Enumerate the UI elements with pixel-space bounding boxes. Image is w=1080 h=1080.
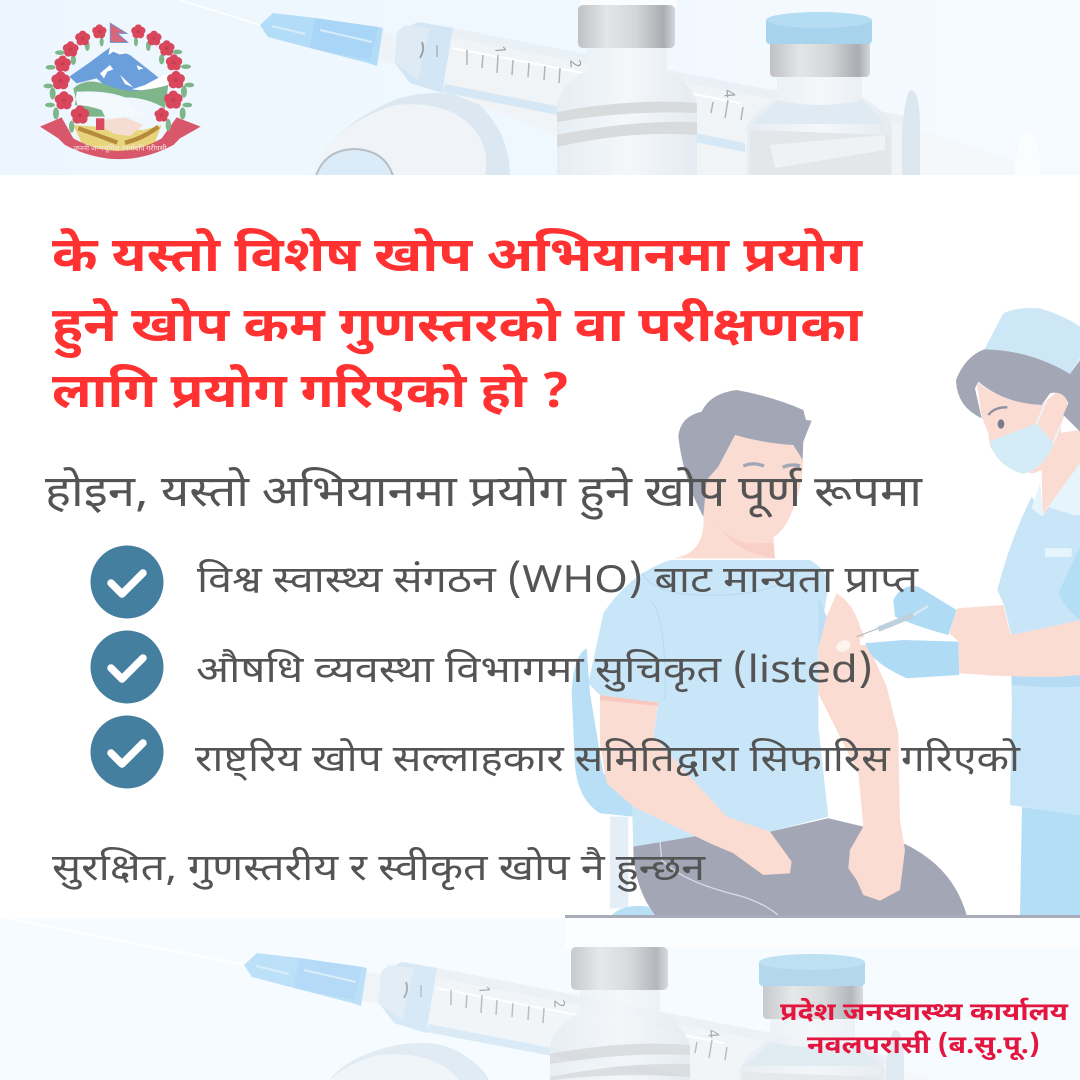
nurse tunic bbox=[997, 467, 1080, 699]
tunic pocket bbox=[1045, 548, 1072, 557]
illustration: nurse vaccinating a seated man bbox=[565, 308, 1080, 918]
nurse trousers bbox=[1020, 807, 1080, 915]
hair bbox=[678, 390, 812, 517]
seated man's body bbox=[572, 560, 967, 915]
emblem leaves bbox=[43, 37, 194, 133]
t-shirt bbox=[588, 560, 828, 847]
emblem flag bbox=[110, 23, 128, 42]
syringe scale digits, top: 2 bbox=[563, 59, 583, 69]
syringe scale digits, bottom: 2 bbox=[547, 999, 567, 1009]
top banner: syringe bbox=[260, 13, 1041, 176]
syringe scale digits, bottom: 4 bbox=[701, 1029, 721, 1039]
trouser seam bbox=[660, 842, 778, 915]
seated man's head bbox=[673, 390, 812, 558]
organization name bbox=[780, 997, 1069, 1064]
syringe scale digits, top: 1 bbox=[488, 45, 508, 55]
nurse sleeve bbox=[1058, 547, 1080, 620]
emblem sky bbox=[77, 92, 143, 118]
nurse cap bbox=[984, 308, 1080, 374]
nurse eye and brow bbox=[988, 407, 1007, 429]
left arm and hand bbox=[600, 700, 792, 875]
nurse upper body bbox=[857, 308, 1080, 699]
list item 1: विश्व स्वास्थ्य संगठन (WHO) बाट मान्यता प्राप्त bbox=[197, 559, 919, 608]
emblem ribbon bbox=[40, 117, 201, 159]
top banner background bbox=[0, 0, 1080, 176]
nurse mask bbox=[989, 423, 1053, 474]
list item 3: राष्ट्रिय खोप सल्लाहकार समितिद्वारा सिफारिस गरिएको bbox=[195, 738, 1022, 787]
organization line 2: नवलपरासी (ब.सु.पू.) bbox=[807, 1030, 1040, 1064]
sleeve cuff shadow bbox=[600, 695, 658, 706]
top banner: needle bbox=[180, 0, 260, 25]
nurse hair bbox=[956, 349, 1080, 432]
organization line 1: प्रदेश जनस्वास्थ्य कार्यालय bbox=[780, 997, 1069, 1031]
face bbox=[703, 435, 803, 543]
right arm and hand bbox=[818, 593, 905, 901]
emblem motto: जननी जन्मभूमिश्च स्वर्गादपि गरीयसी bbox=[74, 144, 167, 154]
emblem rhododendron garland bbox=[51, 24, 185, 124]
bottom banner background bbox=[0, 918, 1080, 1080]
syringe scale digits, top: 4 bbox=[717, 89, 737, 99]
tunic lower band bbox=[1012, 675, 1080, 687]
title question bbox=[52, 227, 864, 427]
bottom banner: syringe bbox=[244, 953, 934, 1080]
nurse collar bbox=[1032, 463, 1080, 517]
collar bbox=[642, 567, 803, 595]
emblem base and handshake bbox=[73, 125, 162, 157]
check icon 1 bbox=[90, 546, 164, 618]
bottom banner: vials bbox=[550, 936, 885, 1080]
nurse face bbox=[977, 382, 1067, 473]
bottom banner pale strip bbox=[565, 918, 1080, 948]
check icon 2 bbox=[90, 630, 164, 704]
bottom banner: rounded vial bbox=[329, 1043, 489, 1080]
syringe scale digits, bottom bbox=[472, 985, 721, 1039]
answer lead line: होइन, यस्तो अभियानमा प्रयोग हुने खोप पूर्ण रूपमा bbox=[45, 466, 923, 524]
check icon 3 bbox=[90, 716, 164, 788]
title line 3: लागि प्रयोग गरिएको हो ? bbox=[52, 364, 570, 427]
chin shadow bbox=[715, 520, 775, 558]
cotton swab bbox=[834, 638, 852, 654]
title line 1: के यस्तो विशेष खोप अभियानमा प्रयोग bbox=[52, 227, 864, 291]
ground line bbox=[565, 915, 1080, 918]
list item 2: औषधि व्यवस्था विभागमा सुचिकृत (listed) bbox=[196, 649, 873, 698]
syringe scale digits, top bbox=[488, 45, 737, 99]
nurse lower tunic bbox=[1010, 699, 1080, 815]
chair bbox=[572, 648, 655, 915]
tissue in hand bbox=[860, 628, 957, 645]
check list bbox=[90, 546, 1022, 788]
emblem mountain bbox=[69, 47, 167, 92]
trousers bbox=[633, 818, 967, 915]
main white panel bbox=[0, 175, 1080, 918]
title line 2: हुने खोप कम गुणस्तरको वा परीक्षणका bbox=[52, 297, 863, 361]
eyebrows bbox=[743, 464, 800, 467]
nurse neck bbox=[1042, 430, 1080, 517]
national emblem of Nepal bbox=[40, 23, 201, 159]
top banner: rounded vial bbox=[312, 93, 510, 176]
sleeve fold bbox=[818, 597, 827, 648]
emblem green hills bbox=[73, 82, 168, 117]
nurse lower glove bbox=[865, 640, 959, 678]
closing statement: सुरक्षित, गुणस्तरीय र स्वीकृत खोप नै हुन्छन bbox=[52, 847, 707, 896]
nurse forearms bbox=[949, 605, 1080, 677]
neck bbox=[673, 513, 775, 558]
syringe in hand bbox=[857, 606, 928, 637]
mask straps bbox=[1037, 400, 1062, 443]
top banner: vials bbox=[557, 0, 892, 176]
needle, bottom banner bbox=[5, 918, 245, 965]
syringe scale digits, bottom: 1 bbox=[472, 985, 492, 995]
nurse upper glove bbox=[893, 586, 957, 635]
